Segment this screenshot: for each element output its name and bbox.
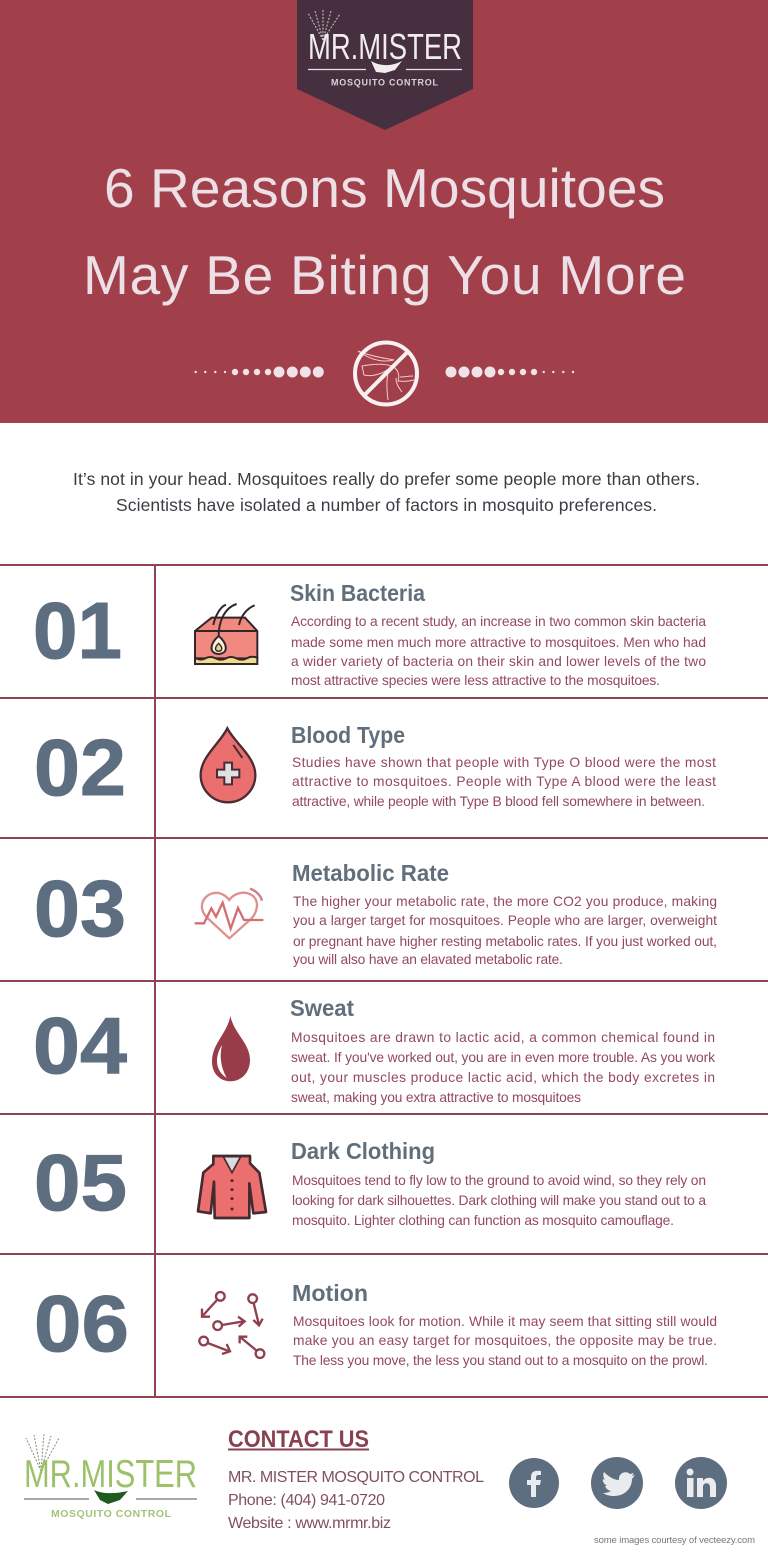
number 04: 04 [33,1001,128,1090]
body text: According to a recent study, an increase in two common skin bacteria [291,614,706,629]
number 03: 03 [34,864,126,953]
header panel [0,0,768,423]
heading: Dark Clothing [291,1138,435,1164]
body text: Studies have shown that people with Type O blood were the most [292,755,716,770]
contact block: MR. MISTER MOSQUITO CONTROL [228,1469,484,1486]
body text [293,894,717,967]
body text: attractive to mosquitoes. People with Type A blood were the least [292,774,716,789]
body text: Mosquitoes look for motion. While it may seem that sitting still would [293,1314,717,1329]
number 01: 01 [33,586,122,675]
icon: motion arrows [199,1292,264,1358]
heading: Metabolic Rate [292,860,449,886]
image credit: some images courtesy of vecteezy.com [594,1535,755,1546]
footer logo: MR.MISTER [24,1453,197,1496]
icon: skin [195,604,257,664]
body text: The higher your metabolic rate, the more CO2 you produce, making [293,894,717,909]
contact block [228,1426,484,1532]
body text: you a larger target for mosquitoes. People who are larger, overweight [293,913,717,928]
intro text [73,469,700,515]
row 4: sweat [33,995,715,1105]
intro text: Scientists have isolated a number of factors in mosquito preferences. [116,495,657,515]
body text [291,1030,715,1105]
row 3: metabolic rate [34,860,717,967]
body text: Mosquitoes tend to fly low to the ground to avoid wind, so they rely on [292,1173,706,1188]
dotted divider right [446,366,574,378]
number 05: 05 [34,1138,127,1227]
title [83,157,686,306]
logo banner: MOSQUITO CONTROL [331,78,438,88]
body text [293,1314,717,1368]
icon: heart rate [195,889,263,938]
icon: sweat drop [212,1016,250,1081]
body text: a wider variety of bacteria on their skin and lower levels of the two [291,654,706,669]
icon: facebook [509,1458,559,1508]
heading: Motion [292,1280,368,1306]
intro text: It’s not in your head. Mosquitoes really do prefer some people more than others. [73,469,700,489]
logo banner: MR.MISTER [308,26,462,67]
icon: linkedin [675,1457,727,1509]
footer logo: MOSQUITO CONTROL [51,1508,172,1520]
heading: Skin Bacteria [290,580,425,606]
contact block: Website : www.mrmr.biz [228,1515,391,1532]
body text: made some men much more attractive to mosquitoes. Men who had [291,635,706,650]
body text: sweat, making you extra attractive to mosquitoes [291,1090,581,1105]
body text [292,1173,706,1228]
row 6: motion [34,1279,717,1368]
contact block: Phone: (404) 941-0720 [228,1492,385,1509]
body text: Mosquitoes are drawn to lactic acid, a common chemical found in [291,1030,715,1045]
contact heading: CONTACT US [228,1426,369,1453]
body text: most attractive species were less attractive to the mosquitoes. [291,673,660,688]
icon: twitter [591,1457,643,1509]
body text: make you an easy target for mosquitoes, the opposite may be true. [293,1333,717,1348]
body text: sweat. If you've worked out, you are in even more trouble. As you work [291,1050,715,1065]
logo banner [297,0,473,130]
body text: out, your muscles produce lactic acid, which the body excretes in [291,1070,715,1085]
body text: mosquito. Lighter clothing can function as mosquito camouflage. [292,1213,674,1228]
body text: or pregnant have higher resting metabolic rates. If you just worked out, [293,934,717,949]
body text: The less you move, the less you stand out to a mosquito on the prowl. [293,1353,708,1368]
row 2: blood type [34,722,716,812]
footer logo [24,1433,197,1520]
number 02: 02 [34,723,126,812]
heading: Blood Type [291,722,405,748]
number 06: 06 [34,1279,129,1368]
title: 6 Reasons Mosquitoes [104,157,665,219]
body text: you will also have an elavated metabolic rate. [293,952,563,967]
icon: jacket [198,1156,266,1218]
dotted divider left [194,366,324,378]
body text [292,755,716,809]
row 5: dark clothing [34,1138,706,1228]
body text: looking for dark silhouettes. Dark clothing will make you stand out to a [292,1193,706,1208]
icon: crossed-out mosquito [355,342,417,404]
heading: Sweat [290,995,354,1021]
row 1: skin bacteria [33,580,706,688]
body text: attractive, while people with Type B blood fell somewhere in between. [292,794,705,809]
body text [291,614,706,688]
icon: blood drop [201,728,255,802]
title: May Be Biting You More [83,244,686,306]
